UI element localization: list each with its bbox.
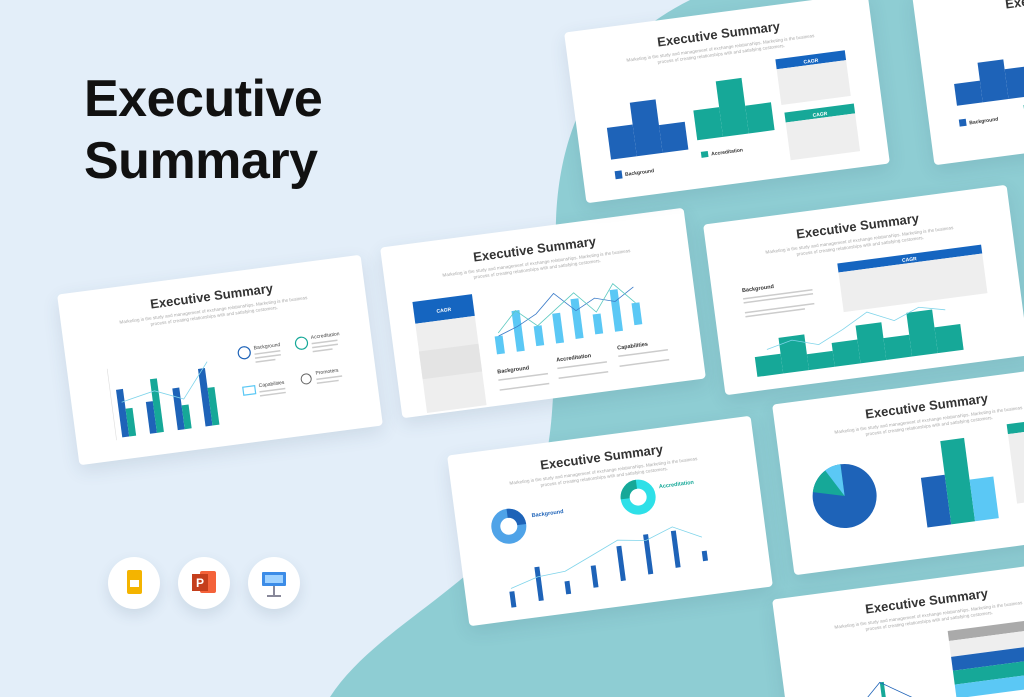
slide 5: table and teal bars xyxy=(703,185,1024,395)
slide 1: grouped bars with icons xyxy=(57,255,383,465)
icon: keynote xyxy=(248,557,300,609)
slide 6: donuts and narrow bars: Background xyxy=(531,509,564,519)
slide 2: CAGR table with light-blue bars: Background xyxy=(497,365,530,375)
slide 8: colored table and chart: Marketing is the study and management of exchange relationships. Marketing is the business xyxy=(834,600,1023,630)
slide 6: donuts and narrow bars: process of creating relationships with and satisfying customers. xyxy=(540,466,668,488)
slide 2: CAGR table with light-blue bars: process of creating relationships with and satisfying customers. xyxy=(473,258,601,280)
slide 3: two bar charts and two tables xyxy=(564,0,890,203)
slide 4: partial top-right xyxy=(912,0,1024,165)
slide 1: grouped bars with icons: Promoters xyxy=(315,368,339,377)
slide 6: donuts and narrow bars xyxy=(447,416,773,626)
slide 2: CAGR table with light-blue bars: Accreditation xyxy=(556,353,592,364)
slide 2: CAGR table with light-blue bars: CAGR xyxy=(436,307,452,315)
slide 1: grouped bars with icons: Capabilities xyxy=(258,380,285,389)
slide 3: two bar charts and two tables: process of creating relationships with and satisfying customers. xyxy=(657,43,785,65)
slide 7: pie and bars: Marketing is the study and management of exchange relationships. Marketing is the business xyxy=(834,405,1023,435)
icon: google slides xyxy=(108,557,160,609)
slide 2: CAGR table with light-blue bars: Marketing is the study and management of exchange relationships. Marketing is the business xyxy=(442,248,631,278)
slide 2: CAGR table with light-blue bars xyxy=(380,208,706,418)
slide 5: table and teal bars: Executive Summary xyxy=(795,210,921,242)
title: Summary xyxy=(84,132,318,190)
slide 1: grouped bars with icons: Marketing is the study and management of exchange relationships. Marketing is the business xyxy=(119,295,308,325)
slide 3: two bar charts and two tables: Executive Summary xyxy=(656,18,782,50)
slide 1: grouped bars with icons: process of creating relationships with and satisfying customers. xyxy=(150,305,278,327)
slide 7: pie and bars: Executive Summary xyxy=(864,390,990,422)
slide 5: table and teal bars: Background xyxy=(742,284,774,294)
slide 1: grouped bars with icons: Executive Summary xyxy=(149,280,275,312)
slide 8: colored table and chart: process of creating relationships with and satisfying customers. xyxy=(865,610,993,632)
slide 7: pie and bars: process of creating relationships with and satisfying customers. xyxy=(865,415,993,437)
icon: powerpoint xyxy=(178,557,230,609)
slide 1: grouped bars with icons: Background xyxy=(253,342,281,351)
slide 5: table and teal bars: CAGR xyxy=(902,256,918,264)
slide 2: CAGR table with light-blue bars: Capabilities xyxy=(617,342,648,352)
slide 3: two bar charts and two tables: Marketing is the study and management of exchange relationships. Marketing is the business xyxy=(626,33,815,63)
title: Executive xyxy=(84,70,322,128)
slide 3: two bar charts and two tables: Background xyxy=(625,168,654,178)
slide 4: partial top-right: Background xyxy=(969,117,999,126)
slide 6: donuts and narrow bars: Marketing is the study and management of exchange relationships. Marketing is the business xyxy=(509,456,698,486)
title xyxy=(84,70,322,190)
slide 8: colored table and chart: Executive Summary xyxy=(864,585,990,617)
slide 1: grouped bars with icons: Accreditation xyxy=(311,331,340,341)
slide 7: pie and bars xyxy=(772,365,1024,575)
slide 3: two bar charts and two tables: CAGR xyxy=(803,58,819,66)
slide 2: CAGR table with light-blue bars: Executive Summary xyxy=(472,233,598,265)
slide 6: donuts and narrow bars: Accreditation xyxy=(659,480,695,490)
slide 8: colored table and chart xyxy=(772,560,1024,697)
slide 5: table and teal bars: Marketing is the study and management of exchange relationships. Marketing is the business xyxy=(765,225,954,255)
slide 6: donuts and narrow bars: Executive Summary xyxy=(539,441,665,473)
icon: powerpoint: P xyxy=(196,576,204,590)
slide 5: table and teal bars: process of creating relationships with and satisfying customers. xyxy=(796,235,924,257)
slide 3: two bar charts and two tables: Accreditation xyxy=(711,147,743,158)
slide 3: two bar charts and two tables: CAGR xyxy=(812,111,828,119)
